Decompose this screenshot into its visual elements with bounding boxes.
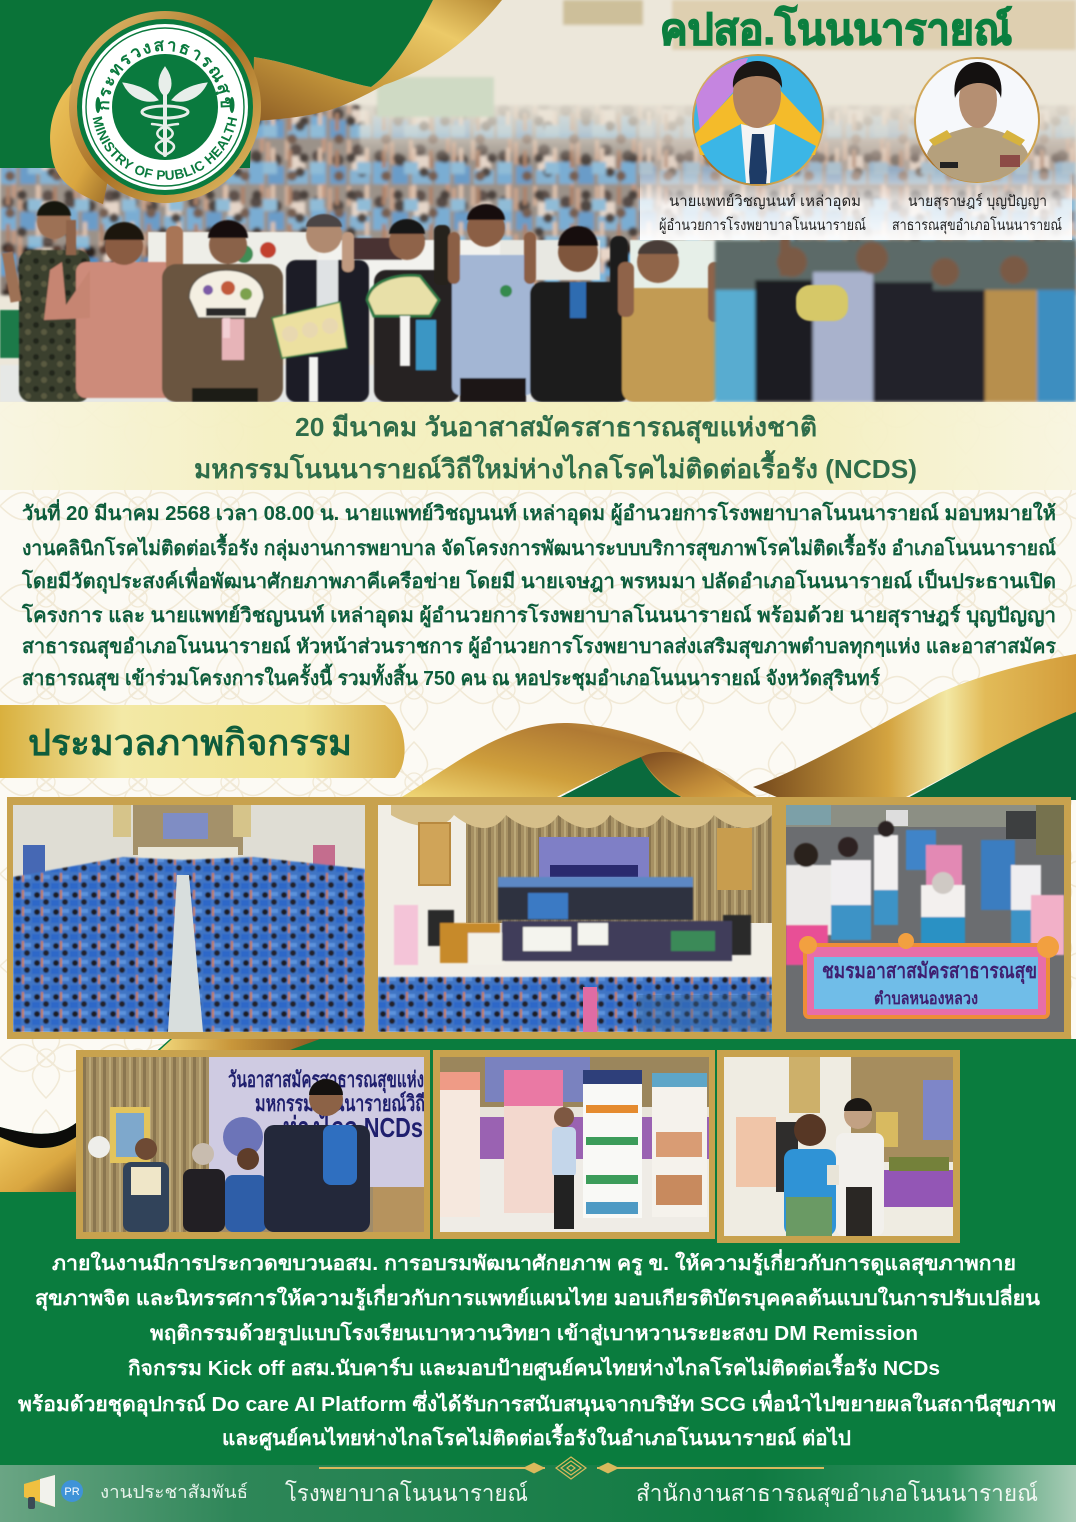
director name: นายแพทย์วิชญนนท์ เหล่าอุดม [669,193,861,211]
icon: megaphone [24,1475,55,1509]
logo Thai name: กระทรวงสาธารณสุข [100,40,230,110]
closing paragraph: และศูนย์คนไทยห่างไกลโรคไม่ติดต่อเรื้อรังในอำเภอโนนนารายณ์ ต่อไป [222,1423,851,1452]
body paragraph: สาธารณสุขอำเภอโนนนารายณ์ หัวหน้าส่วนราชการ ผู้อำนวยการโรงพยาบาลส่งเสริมสุขภาพตำบลทุกๆแห่ง และอาสาสมัคร [22,634,1056,660]
logo side marks [96,97,234,113]
header photo [0,0,1076,402]
footer label: district office: สำนักงานสาธารณสุขอำเภอโนนนารายณ์ [636,1480,1038,1507]
page background [0,400,1076,1522]
hand-held signs [189,270,848,402]
header title: คปสอ.โนนนารายณ์ [660,5,1012,53]
officials front row [2,201,722,402]
icon: PR badge [61,1480,83,1502]
section heading text: ประมวลภาพกิจกรรม [28,722,352,763]
icon: caduceus [123,67,207,155]
logo: Ministry of Public Health [69,11,261,203]
photo row 2 frames [76,1050,960,1243]
green and gold corner ribbon [0,0,502,204]
title line 1: 20 มีนาคม วันอาสาสมัครสาธารณสุขแห่งชาติ [295,412,817,444]
body paragraph: วันที่ 20 มีนาคม 2568 เวลา 08.00 น. นายแพทย์วิชญนนท์ เหล่าอุดม ผู้อำนวยการโรงพยาบาลโนนนารายณ์ มอบหมายให้ [22,498,1056,527]
section heading pill [0,705,405,778]
marching participants [786,821,1064,965]
footer label: public relations: งานประชาสัมพันธ์ [100,1482,248,1502]
footer band [0,1457,1076,1522]
floor and signage behind officials [0,232,760,402]
body paragraph: สาธารณสุข เข้าร่วมโครงการในครั้งนี้ รวมทั้งสิ้น 750 คน ณ หอประชุมอำเภอโนนนารายณ์ จังหวัดสุรินทร์ [22,663,880,691]
white name panel [640,170,1072,240]
director role: ผู้อำนวยการโรงพยาบาลโนนนารายณ์ [659,216,866,234]
body paragraph: โดยมีวัตถุประสงค์เพื่อพัฒนาศักยภาพภาคีเครือข่าย โดยมี นายเจษฎา พรหมมา ปลัดอำเภอโนนนารายณ์ เป็นประธานเปิด [21,566,1056,594]
body paragraph: โครงการ และ นายแพทย์วิชญนนท์ เหล่าอุดม ผู้อำนวยการโรงพยาบาลโนนนารายณ์ พร้อมด้วย นายสุราษฎร์ บุญปัญญา [21,603,1056,629]
crowd of volunteers [0,0,1076,295]
portrait: district health officer [914,57,1040,183]
photo 5: health education posters [440,1057,709,1232]
closing paragraph: กิจกรรม Kick off อสม.นับคาร์บ และมอบป้ายศูนย์คนไทยห่างไกลโรคไม่ติดต่อเรื้อรัง NCDs [128,1353,940,1382]
title line 2: มหกรรมโนนนารายณ์วิถีใหม่ห่างไกลโรคไม่ติดต่อเรื้อรัง (NCDS) [194,449,917,484]
title band [0,402,1076,490]
closing paragraph: พร้อมด้วยชุดอุปกรณ์ Do care AI Platform ซึ่งได้รับการสนับสนุนจากบริษัท SCG เพื่อนำไปขยายผลในสถานีสุขภาพ [18,1389,1056,1417]
name labels [659,193,1062,235]
closing paragraph [18,1248,1056,1452]
parade banner: ตำบลหนองหลวง [874,989,978,1008]
parade banner [799,933,1059,1017]
portrait: hospital director [692,54,824,186]
body paragraph: งานคลินิกโรคไม่ติดต่อเรื้อรัง กลุ่มงานการพยาบาล จัดโครงการพัฒนาระบบบริการสุขภาพโรคไม่ติดเรื้อรัง อำเภอโนนนารายณ์ [22,533,1056,561]
photo row 1 frame [7,797,1071,1039]
logo English name: MINISTRY OF PUBLIC HEALTH [92,116,238,180]
closing paragraph: ภายในงานมีการประกวดขบวนอสม. การอบรมพัฒนาศักยภาพ ครู ข. ให้ความรู้เกี่ยวกับการดูแลสุขภาพกาย [52,1248,1016,1277]
photo 2: stage award group [378,805,772,1032]
photo 4: talk on stage [83,1057,425,1232]
ornament divider [319,1457,824,1479]
right side mirrored group [715,236,1076,402]
officer name: นายสุราษฎร์ บุญปัญญา [908,193,1047,211]
closing paragraph: พฤติกรรมด้วยรูปแบบโรงเรียนเบาหวานวิทยา เข้าสู่เบาหวานระยะสงบ DM Remission [150,1321,918,1347]
photo 1: hall crowd [13,805,365,1032]
photo 3: street parade [786,805,1064,1032]
footer label: hospital: โรงพยาบาลโนนนารายณ์ [285,1480,528,1506]
closing paragraph: สุขภาพจิต และนิทรรศการให้ความรู้เกี่ยวกับการแพทย์แผนไทย มอบเกียรติบัตรบุคคลต้นแบบในการปรับเปลี่ยน [35,1283,1040,1312]
photo 6: award handover [724,1057,953,1236]
icon: PR badge: PR [64,1486,80,1498]
green lower background with gold ribbons [0,654,1076,1522]
body paragraph [21,498,1056,691]
